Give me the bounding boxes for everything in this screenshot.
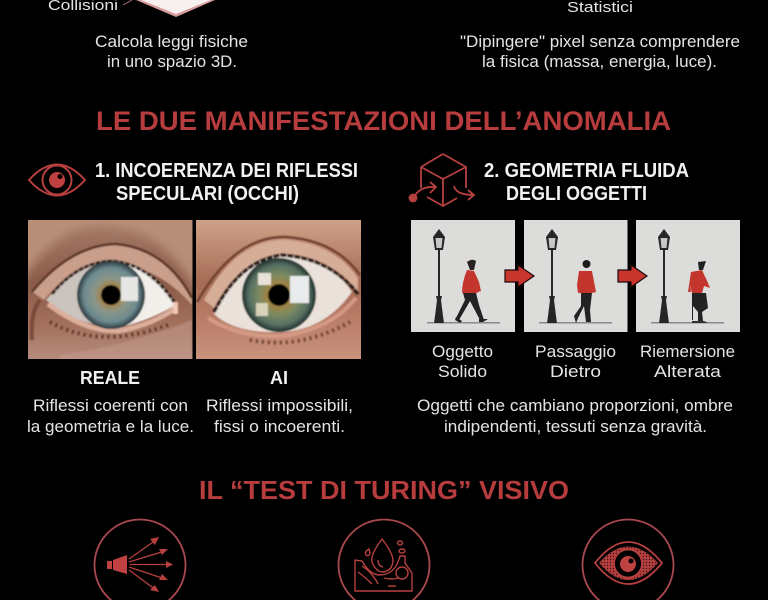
text: pixel description: la fisica (massa, energia, luce).	[482, 53, 717, 71]
title: le due manifestazioni: LE DUE MANIFESTAZIONI DELL’ANOMALIA	[96, 106, 671, 136]
captions: object sequence: Dietro	[550, 363, 601, 381]
heading: geometria fluida	[484, 160, 689, 205]
icon: eye	[29, 164, 85, 196]
captions: object sequence: Riemersione	[640, 343, 735, 361]
heading: incoerenza: SPECULARI (OCCHI)	[116, 183, 299, 205]
text: physics description: Calcola leggi fisiche	[95, 33, 248, 51]
top left fragment: physics engine	[48, 0, 215, 17]
captions: image comparison	[80, 368, 288, 388]
heading: geometria fluida: DEGLI OGGETTI	[506, 183, 647, 205]
lamp post	[539, 229, 612, 324]
icon: light rays	[94, 520, 186, 600]
photo: real eye	[28, 220, 192, 359]
text: real eye description: Riflessi coerenti con	[33, 397, 188, 415]
text: physics description	[95, 33, 248, 71]
heading: geometria fluida: 2. GEOMETRIA FLUIDA	[484, 160, 689, 182]
altered figure	[688, 261, 710, 323]
heading: incoerenza: 1. INCOERENZA DEI RIFLESSI	[95, 160, 358, 182]
captions: object sequence: Alterata	[654, 363, 722, 381]
text: AI eye description	[206, 397, 353, 436]
photo: AI eye	[196, 220, 361, 359]
text: pixel description	[460, 33, 740, 71]
lamp post	[427, 229, 500, 324]
icon: cube with arrows	[410, 154, 474, 206]
title: test di turing: IL “TEST DI TURING” VISIVO	[199, 475, 569, 505]
arrow: behind to altered	[618, 265, 647, 287]
captions: object sequence: Oggetto	[432, 343, 493, 361]
captions: object sequence: Passaggio	[535, 343, 616, 361]
icon: watchful eye	[582, 520, 674, 600]
walking figure	[455, 260, 488, 323]
lamp post	[651, 229, 724, 324]
captions: object sequence: Solido	[438, 363, 487, 381]
panel: solid object	[411, 220, 515, 332]
text: object description	[417, 397, 733, 436]
walking figure	[574, 260, 596, 323]
text: pixel description: "Dipingere" pixel senza comprendere	[460, 33, 740, 51]
text: physics description: in uno spazio 3D.	[107, 53, 237, 71]
text: real eye description	[27, 397, 194, 436]
text: AI eye description: fissi o incoerenti.	[214, 418, 345, 436]
text: object description: Oggetti che cambiano proporzioni, ombre	[417, 397, 733, 415]
text: real eye description: la geometria e la luce.	[27, 418, 194, 436]
captions: image comparison: AI	[270, 368, 288, 388]
panel: altered	[636, 220, 740, 332]
arrow: solid to behind	[505, 265, 534, 287]
text: object description: indipendenti, tessuti senza gravità.	[444, 418, 707, 436]
captions: image comparison: REALE	[80, 368, 140, 388]
icon: cube fragment	[123, 0, 215, 17]
text: AI eye description: Riflessi impossibili,	[206, 397, 353, 415]
captions: object sequence	[432, 343, 735, 381]
icon: fluid drop	[338, 520, 430, 600]
heading: incoerenza	[95, 160, 358, 205]
panel: behind	[524, 220, 628, 332]
